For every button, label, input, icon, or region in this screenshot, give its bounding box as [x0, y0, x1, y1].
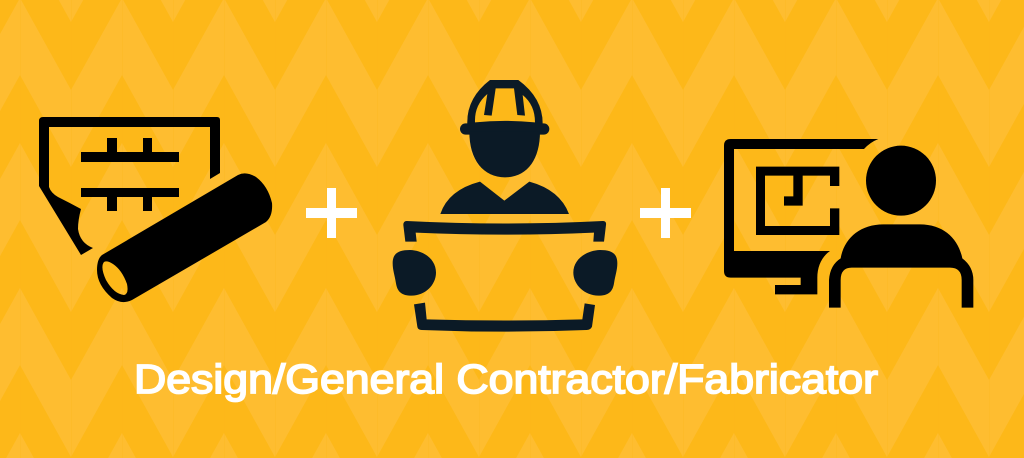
icon: person at computer monitor	[724, 139, 973, 308]
floor plan lines	[81, 138, 179, 211]
shoulders	[440, 182, 569, 214]
plan sheet top	[403, 221, 606, 242]
blueprint sheet with curled corner	[39, 117, 220, 255]
person head	[866, 146, 936, 216]
plan sheet bottom	[414, 303, 595, 332]
monitor	[724, 139, 878, 294]
icon: construction worker holding plans	[393, 80, 617, 332]
plus sign 1	[306, 188, 357, 238]
icon: blueprint sheet and roll	[39, 117, 272, 302]
left hand	[393, 250, 436, 296]
caption: Design/General Contractor/Fabricator	[134, 356, 878, 402]
head	[469, 132, 540, 177]
right hand	[573, 250, 617, 296]
rolled blueprint tube	[97, 173, 272, 302]
person body	[829, 224, 973, 308]
hard hat	[460, 80, 549, 135]
floor plan on screen	[756, 167, 839, 235]
plus sign 2	[640, 188, 691, 238]
